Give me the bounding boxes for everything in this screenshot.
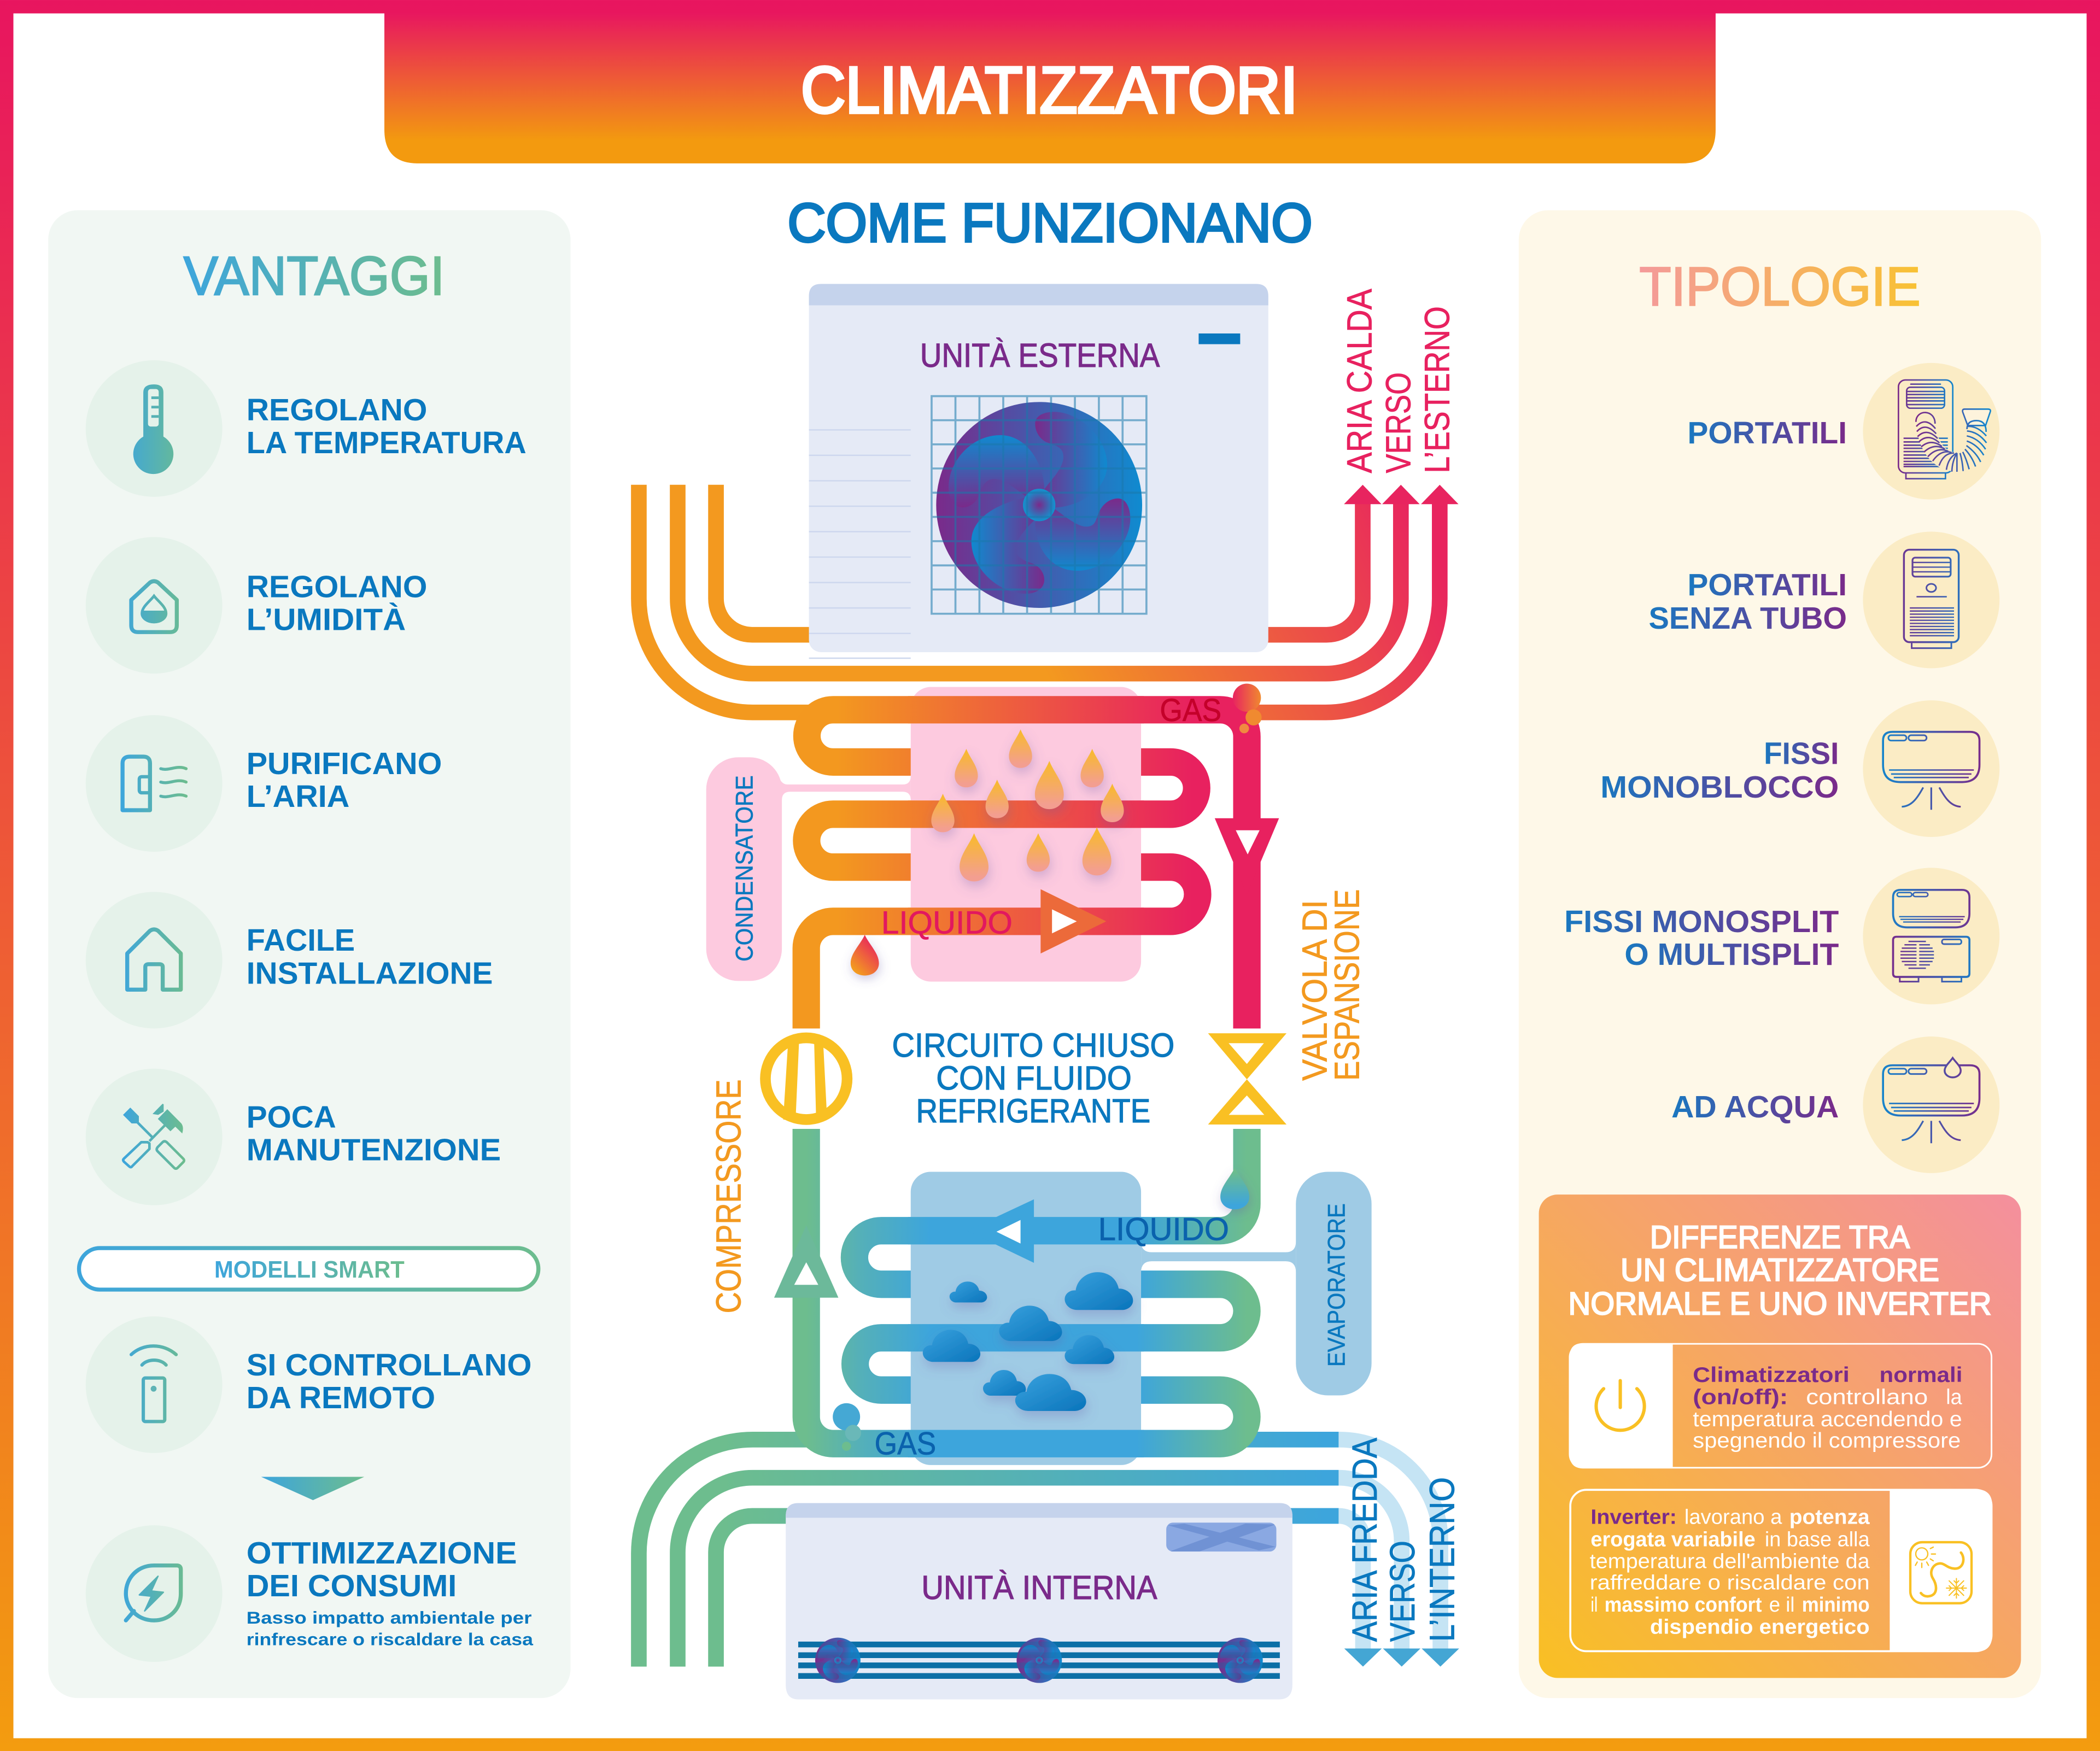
label: aria calda verso l'esterno: VERSO (1379, 372, 1418, 473)
type: portatili senza tubo: PORTATILI (1688, 567, 1847, 602)
label: aria calda verso l'esterno (1340, 289, 1456, 473)
heading: differenze: DIFFERENZE TRA (1650, 1220, 1910, 1255)
condenser panel (706, 687, 1141, 982)
title: CLIMATIZZATORI (801, 54, 1298, 127)
type: fissi monosplit o multisplit: O MULTISPLIT (1624, 937, 1839, 971)
item: purificano l'aria: L’ARIA (247, 779, 349, 813)
evaporator coil: visible runs (908, 1231, 1144, 1444)
text: normali: Climatizzatori (1693, 1363, 1850, 1387)
item: poca manutenzione (86, 1069, 501, 1205)
drop: liquid cold (1220, 1168, 1249, 1209)
cold air pipes (639, 1439, 1338, 1667)
label: compressore: COMPRESSORE (710, 1079, 748, 1313)
card: inverter (1570, 1489, 1992, 1652)
item: ottimizzazione dei consumi: DEI CONSUMI (247, 1568, 457, 1603)
type: fissi monoblocco: MONOBLOCCO (1600, 770, 1839, 804)
icon: remote control (131, 1346, 176, 1421)
outdoor unit (809, 284, 1268, 658)
icon: power (1596, 1381, 1645, 1430)
item: regolano l'umidita (86, 537, 427, 674)
label: gas hot side: GAS (1160, 693, 1221, 728)
text: normali: (on/off): (1693, 1385, 1788, 1409)
badge: modelli smart: MODELLI SMART (214, 1257, 405, 1283)
icon: thermometer (133, 384, 173, 474)
label: aria fredda verso l'interno (1346, 1437, 1461, 1642)
card: climatizzatori normali (1570, 1343, 1992, 1468)
gas bubbles: evaporator (833, 1403, 861, 1451)
text: inverter: massimo confort (1605, 1594, 1762, 1617)
panel: tipologie (1519, 210, 2041, 1698)
drops: condensation (931, 729, 1124, 881)
type: portatili senza tubo (1648, 532, 1999, 668)
label: liquido hot side: LIQUIDO (881, 905, 1013, 940)
label: gas cold side: GAS (875, 1426, 936, 1461)
type: portatili senza tubo: SENZA TUBO (1648, 601, 1847, 635)
item: poca manutenzione: MANUTENZIONE (247, 1133, 501, 1167)
heading: differenze: NORMALE E UNO INVERTER (1569, 1286, 1992, 1321)
text: normali: spegnendo il compressore (1693, 1429, 1961, 1453)
label: aria calda verso l'esterno: L’ESTERNO (1418, 306, 1456, 473)
evaporator panel (911, 1172, 1372, 1465)
item: regolano l'umidita: L’UMIDITÀ (247, 602, 406, 637)
text: normali: controllano (1806, 1385, 1928, 1409)
louvers overlay (798, 1644, 1280, 1676)
label: condensatore: CONDENSATORE (732, 775, 758, 962)
arrow: liquid flow left (967, 1199, 1034, 1263)
type: fissi monoblocco: FISSI (1764, 736, 1839, 771)
arrow: liquid flow right (1040, 889, 1106, 953)
type: fissi monosplit o multisplit (1564, 868, 1999, 1004)
clouds (923, 1272, 1133, 1411)
gas bubbles: condenser (1233, 684, 1262, 733)
item: purificano l'aria (86, 715, 442, 852)
evaporator coil (806, 1129, 1247, 1444)
text: inverter: lavorano a (1684, 1506, 1782, 1529)
item: ottimizzazione dei consumi: OTTIMIZZAZIONE (247, 1536, 517, 1570)
item: ottimizzazione dei consumi: Basso impatto ambientale per (247, 1608, 531, 1627)
text: inverter (1590, 1506, 1870, 1639)
icon: water unit (1883, 1058, 1980, 1143)
icon: wall unit (1883, 732, 1980, 810)
heading: differenze (1569, 1220, 1992, 1321)
type: ad acqua (1671, 1036, 1999, 1173)
item: facile installazione (86, 892, 493, 1028)
louvers (798, 1644, 1280, 1676)
item: ottimizzazione dei consumi (86, 1525, 533, 1662)
icon: indoor fans (815, 1638, 1263, 1683)
icon: sun and snow (1910, 1542, 1972, 1603)
label: unita esterna: UNITÀ ESTERNA (920, 337, 1160, 374)
heading: tipologie: TIPOLOGIE (1639, 256, 1921, 318)
type: portatili (1688, 363, 1999, 500)
header banner (384, 14, 1716, 163)
text: inverter: dispendio energetico (1650, 1616, 1870, 1639)
heading: come funzionano: COME FUNZIONANO (787, 192, 1313, 254)
label: evaporatore: EVAPORATORE (1323, 1203, 1350, 1367)
cold light air pipes (1338, 1439, 1441, 1650)
item: regolano l'umidita: REGOLANO (247, 570, 427, 604)
panel: vantaggi (48, 210, 571, 1698)
icon: portable no hose (1904, 550, 1959, 648)
arrow: down triangle (261, 1477, 364, 1500)
panel: differenze normale inverter (1539, 1194, 2021, 1678)
label: circuito chiuso (892, 1027, 1174, 1129)
hot air pipes (639, 485, 1440, 712)
label: aria calda verso l'esterno: ARIA CALDA (1340, 289, 1379, 473)
fan grille (932, 396, 1146, 614)
type: portatili: PORTATILI (1688, 415, 1847, 450)
text: inverter: il (1590, 1594, 1598, 1617)
icon: humid house (131, 581, 177, 632)
arrow: flow down (1215, 818, 1279, 894)
text: inverter: temperatura dell'ambiente da (1590, 1550, 1870, 1573)
item: facile installazione: INSTALLAZIONE (247, 956, 493, 990)
text: inverter: Inverter: (1590, 1506, 1677, 1529)
item: regolano la temperatura: LA TEMPERATURA (247, 425, 527, 460)
text: normali (1693, 1363, 1962, 1453)
type: fissi monosplit o multisplit: FISSI MONOSPLIT (1564, 904, 1839, 939)
label: unita interna: UNITÀ INTERNA (921, 1569, 1157, 1606)
arrows: cold air (1344, 1649, 1459, 1667)
item: si controllano da remoto: SI CONTROLLANO (247, 1348, 531, 1382)
item: facile installazione: FACILE (247, 923, 355, 957)
text: inverter: e il (1769, 1594, 1794, 1617)
text: normali: la (1946, 1385, 1962, 1409)
item: poca manutenzione: POCA (247, 1100, 336, 1134)
heading: differenze: UN CLIMATIZZATORE (1621, 1252, 1939, 1288)
label: valvola di espansione (1295, 889, 1367, 1081)
icon: leaf with bolt (126, 1566, 181, 1620)
condenser coil: visible runs (908, 710, 1144, 921)
label: valvola di espansione: VALVOLA DI (1295, 900, 1334, 1081)
icon: tools (123, 1104, 184, 1169)
expansion valve (1208, 1033, 1286, 1125)
text: inverter: in base alla (1765, 1528, 1870, 1551)
item: si controllano da remoto: DA REMOTO (247, 1380, 435, 1415)
text: normali: normali (1880, 1363, 1962, 1387)
text: inverter: raffreddare o riscaldare con (1590, 1572, 1870, 1595)
icon: house (127, 929, 181, 989)
text: inverter: minimo (1802, 1594, 1870, 1617)
item: regolano la temperatura (86, 360, 527, 497)
display (1166, 1522, 1276, 1551)
arrow: flow up (774, 1225, 838, 1298)
type: fissi monoblocco (1600, 700, 1999, 837)
heading: vantaggi: VANTAGGI (184, 245, 444, 307)
compressor (765, 1036, 847, 1121)
text: normali: temperatura accendendo e (1693, 1408, 1962, 1431)
badge: modelli smart (79, 1248, 539, 1290)
label: circuito chiuso: REFRIGERANTE (916, 1092, 1150, 1129)
label: circuito chiuso: CON FLUIDO (936, 1059, 1132, 1097)
item: regolano la temperatura: REGOLANO (247, 393, 427, 427)
label: valvola di espansione: ESPANSIONE (1328, 889, 1367, 1081)
type: ad acqua: AD ACQUA (1671, 1090, 1839, 1124)
drop: liquid (851, 935, 879, 976)
indoor unit (786, 1503, 1292, 1700)
label: aria fredda verso l'interno: L’INTERNO (1423, 1477, 1461, 1642)
icon: split unit (1893, 890, 1969, 982)
arrows: hot air (1344, 485, 1459, 504)
item: purificano l'aria: PURIFICANO (247, 746, 442, 781)
label: aria fredda verso l'interno: VERSO (1383, 1541, 1422, 1642)
text: inverter: erogata variabile (1590, 1528, 1756, 1551)
item: si controllano da remoto (86, 1316, 531, 1453)
label: liquido cold side: LIQUIDO (1098, 1211, 1229, 1247)
label: aria fredda verso l'interno: ARIA FREDDA (1346, 1437, 1384, 1642)
icon: air purifier (122, 757, 186, 810)
icon: outdoor fan (936, 402, 1142, 608)
label: circuito chiuso: CIRCUITO CHIUSO (892, 1027, 1174, 1064)
condenser coil (806, 710, 1247, 1028)
text: inverter: potenza (1789, 1506, 1870, 1529)
icon: portable with hose (1898, 380, 1991, 479)
item: ottimizzazione dei consumi: rinfrescare o riscaldare la casa (247, 1629, 533, 1649)
